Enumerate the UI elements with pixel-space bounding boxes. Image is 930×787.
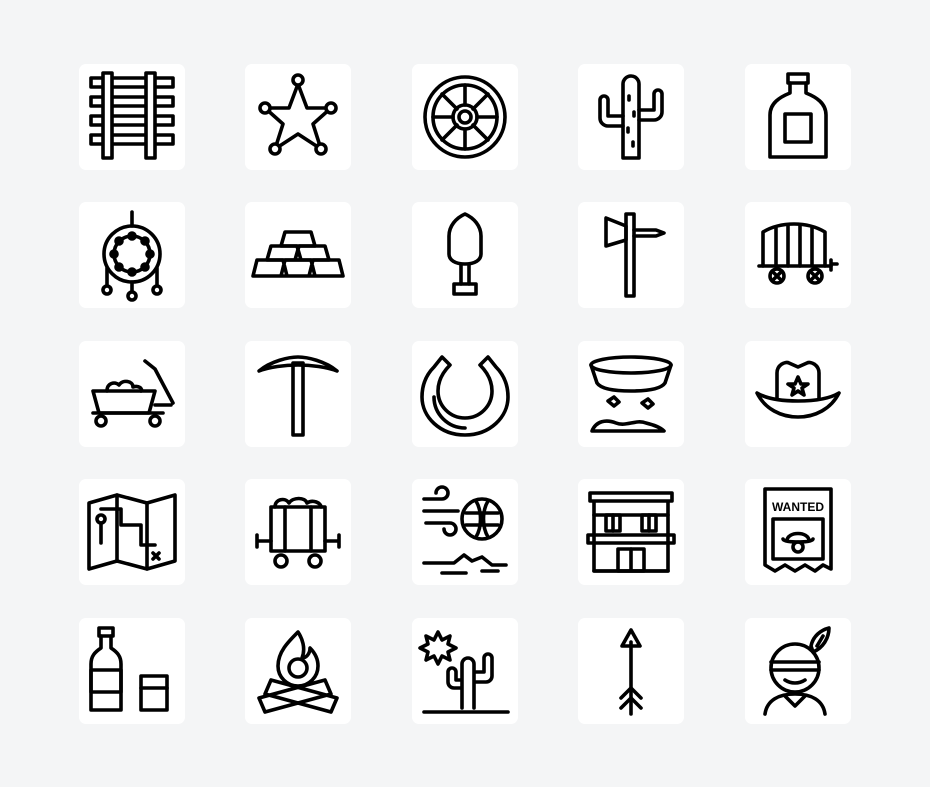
icon: gold bars [245,202,351,308]
icon: saloon building [578,479,684,585]
icon: wagon wheel [412,64,518,170]
icon: cactus [578,64,684,170]
icon: shovel [412,202,518,308]
icon: bottle and glass [79,618,185,724]
icon: desert cactus sun [412,618,518,724]
icon: pickaxe [245,341,351,447]
icon: campfire [245,618,351,724]
icon: tomahawk [578,202,684,308]
icon: sheriff star [245,64,351,170]
icon: treasure map [79,479,185,585]
icon: ore wagon [245,479,351,585]
icon: native person [745,618,851,724]
icon: dreamcatcher [79,202,185,308]
icon: bottle [745,64,851,170]
icon: railroad tracks [79,64,185,170]
icon: gold pan [578,341,684,447]
icon: cowboy hat [745,341,851,447]
icon: wanted poster [745,479,851,585]
icon: arrow [578,618,684,724]
icon: horseshoe [412,341,518,447]
icon: tumbleweed wind [412,479,518,585]
icon: mine cart with handle [79,341,185,447]
icon: wanted poster: WANTED [772,500,824,514]
icon: covered wagon [745,202,851,308]
